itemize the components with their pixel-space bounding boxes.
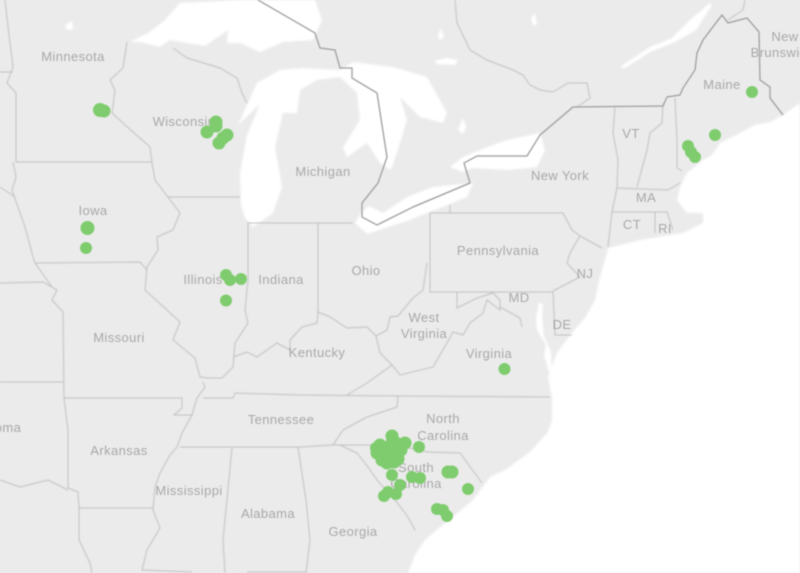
Iowa points [80, 221, 94, 254]
place labels: NJ [577, 266, 593, 281]
place labels: New [771, 29, 799, 44]
place labels: West [409, 310, 439, 325]
place labels: Mississippi [155, 483, 223, 498]
place labels: South [398, 460, 434, 475]
Minnesota points [93, 103, 110, 118]
Chesapeake Bay [536, 303, 552, 375]
place labels: Kentucky [289, 345, 345, 360]
Virginia point [498, 363, 510, 375]
place labels: Virginia [466, 346, 513, 361]
international border with Canada [258, 0, 783, 225]
place labels: Wisconsin [153, 114, 215, 129]
place labels: Illinois [183, 272, 223, 287]
Canadian provincial line [455, 0, 590, 107]
data points [80, 86, 758, 522]
place labels: Iowa [78, 203, 108, 218]
place labels: Virginia [401, 326, 448, 341]
Wisconsin points [200, 116, 234, 150]
Lake Superior [130, 0, 322, 52]
place labels: Carolina [390, 476, 442, 491]
New Brunswick border fragment [728, 0, 745, 20]
place labels: Georgia [328, 524, 378, 539]
place labels: Minnesota [41, 49, 105, 64]
Pennsylvania, New York, New Jersey borders [450, 205, 602, 248]
place labels: MD [508, 290, 530, 305]
West Virginia and Virginia borders [376, 292, 500, 375]
place labels: Maine [703, 77, 741, 92]
place labels: CT [623, 217, 641, 232]
place labels: Alabama [241, 506, 295, 521]
Lake Ontario [450, 133, 545, 172]
place labels: DE [553, 317, 571, 332]
Atlantic Ocean [408, 103, 800, 573]
place labels: Pennsylvania [457, 243, 539, 258]
South Carolina cluster [370, 430, 474, 522]
place labels: Arkansas [90, 443, 148, 458]
place labels: Ohio [351, 263, 381, 278]
place labels: RI [658, 221, 672, 236]
Ohio River and Kentucky borders [233, 263, 427, 357]
Saint Lawrence River [620, 3, 712, 68]
Illinois points [220, 269, 247, 306]
place labels: VT [622, 126, 640, 141]
place labels: Missouri [93, 330, 145, 345]
Lake Erie [355, 183, 473, 234]
place labels: North [426, 411, 460, 426]
Arkansas, Missouri, Tennessee borders [64, 398, 192, 415]
Maine points [682, 86, 758, 163]
place labels: MA [636, 190, 656, 205]
place labels: Indiana [258, 272, 304, 287]
Minnesota, Iowa and Wisconsin borders [5, 0, 152, 162]
place labels: Carolina [417, 428, 469, 443]
Carolinas, Georgia borders [333, 396, 398, 445]
place labels: Michigan [295, 164, 351, 179]
Lakes Michigan and Huron [238, 62, 447, 227]
place labels: New York [531, 168, 589, 183]
small inland lakes [434, 58, 458, 65]
place labels: Tennessee [248, 412, 314, 427]
New England borders [608, 107, 618, 247]
